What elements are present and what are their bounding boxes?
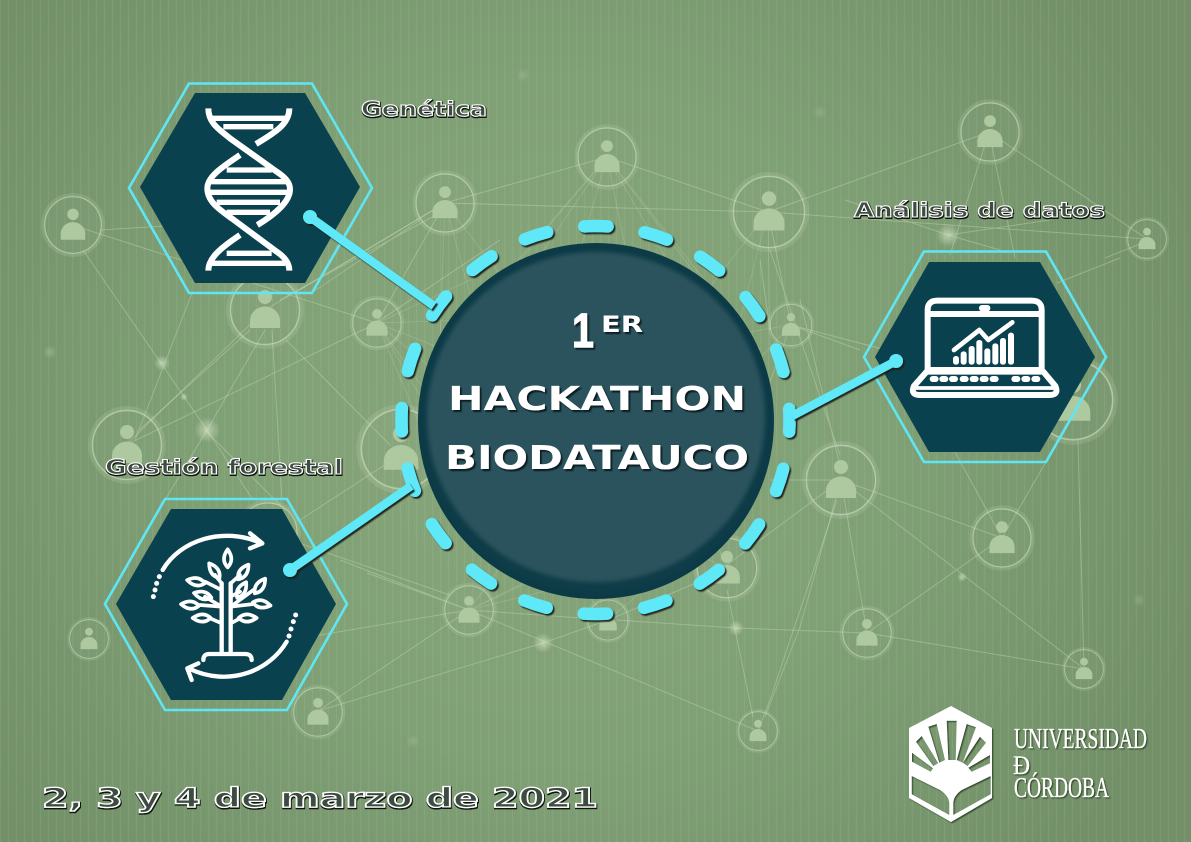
title: ER [601,313,643,338]
panel: genetics hexagon [129,84,372,293]
panel: data analysis hexagon [864,252,1106,462]
logo: university name: Ð [1013,751,1030,780]
title: 1 [572,305,594,358]
central disc [418,243,774,599]
network person nodes [43,101,1168,752]
logo: university name [1013,723,1147,804]
date: 2, 3 y 4 de marzo de 2021 [42,783,598,814]
panel: forest management hexagon [105,499,347,710]
fan of fine lines behind the central disc [377,157,791,620]
title: BIODATAUCO [445,438,749,477]
dashed ring around disc [402,226,790,614]
label: data analysis: Análisis de datos [854,198,1105,222]
network connection lines [72,132,1150,731]
icon: DNA helix [207,108,290,271]
icon: tree with cycle arrows [151,533,298,680]
glow points at line crossings [43,68,1146,748]
arrow: forest management connector [283,486,411,577]
arrow: genetics connector [303,210,434,306]
label: forest management: Gestión forestal [105,455,343,479]
label: genetics: Genética [361,97,487,121]
title: HACKATHON [448,379,746,418]
icon: laptop with chart [913,301,1056,395]
logo: university shield [909,706,992,822]
arrow: data analysis connector [792,354,903,416]
logo: university name: CÓRDOBA [1014,771,1109,804]
title [445,305,749,477]
